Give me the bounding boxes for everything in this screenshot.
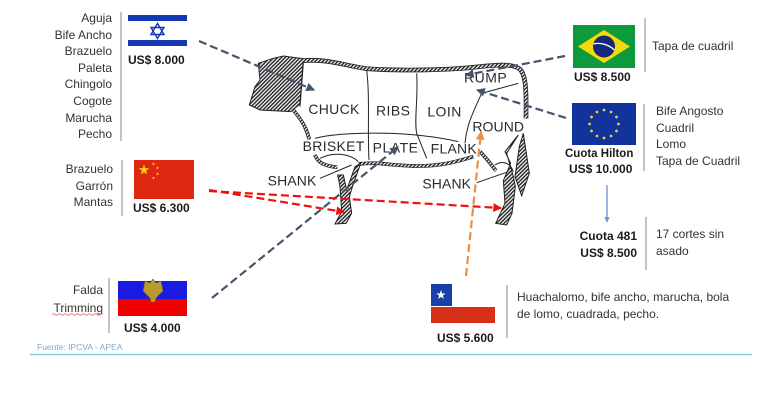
Israel cut list: Bife Ancho	[55, 28, 112, 42]
quota 481 price	[580, 229, 637, 260]
Hilton cut list: Tapa de Cuadril	[656, 154, 740, 168]
quota 481 price: US$ 8.500	[580, 246, 637, 260]
Hilton cut list: Cuadril	[656, 121, 694, 135]
Russia cut list: Trimming	[53, 301, 103, 315]
cut division lines	[300, 63, 518, 183]
panel: Chile	[431, 284, 729, 345]
Hilton quota price: Cuota Hilton	[565, 148, 633, 160]
arrow: Israel to chuck	[199, 41, 314, 90]
cut labels: ROUND	[472, 119, 524, 135]
arrow: European Union to rump and loin	[477, 90, 566, 118]
Russia cut list: Falda	[73, 283, 103, 297]
cut labels: SHANK	[422, 176, 472, 192]
cut labels: PLATE	[373, 139, 418, 155]
cut labels: SHANK	[268, 172, 317, 188]
China cut list: Brazuelo	[66, 162, 113, 176]
icon: Russia flag	[118, 279, 187, 316]
Israel cut list: Aguja	[81, 11, 112, 25]
arrow: China to rear shank	[209, 191, 501, 208]
cut labels: RUMP	[464, 70, 507, 86]
China cut list: Mantas	[74, 195, 113, 209]
Israel cut list: Brazuelo	[65, 44, 112, 58]
China cut list: Garrón	[76, 179, 113, 193]
icon: Israel flag	[128, 15, 187, 46]
panel: quota 481	[580, 217, 724, 270]
cut labels: LOIN	[427, 104, 461, 120]
cut labels: BRISKET	[303, 138, 365, 154]
source note: Fuente: IPCVA - APEA	[37, 342, 123, 352]
Israel cut list: Marucha	[65, 111, 112, 125]
panel: Israel	[55, 11, 187, 141]
cow chest, belly and flank bands	[293, 110, 496, 171]
quota 481 cut list: asado	[656, 244, 689, 258]
Brazil cut list: Tapa de cuadril	[652, 39, 733, 53]
Hilton cut list: Lomo	[656, 137, 686, 151]
Chile cut list: Huachalomo, bife ancho, marucha, bola	[517, 290, 729, 304]
quota 481 cut list: 17 cortes sin	[656, 227, 724, 241]
icon: China flag	[134, 160, 194, 199]
Israel cut list: Paleta	[78, 61, 112, 75]
arrow: Brazil to rump	[466, 56, 565, 75]
China price: US$ 6.300	[133, 201, 190, 215]
Chile cut list: de lomo, cuadrada, pecho.	[517, 307, 659, 321]
Israel cut list: Cogote	[73, 94, 112, 108]
panel: Brazil	[573, 18, 733, 84]
Israel cut list: Chingolo	[65, 77, 112, 91]
Russia cut list	[52, 283, 103, 315]
Hilton quota price: US$ 10.000	[569, 162, 633, 176]
Brazil price: US$ 8.500	[574, 70, 631, 84]
icon: European Union flag	[572, 103, 636, 145]
Israel cut list	[55, 11, 112, 141]
Israel cut list: Pecho	[78, 127, 112, 141]
quota 481 price: Cuota 481	[580, 229, 637, 243]
Chile cut list	[517, 290, 729, 321]
cow legs and tail	[335, 133, 529, 225]
cow diagram with beef cuts	[249, 56, 529, 225]
panel: China	[66, 160, 194, 216]
arrow: Chile to round	[466, 132, 481, 276]
icon: Chile flag	[431, 284, 495, 323]
icon: Brazil flag	[573, 25, 635, 68]
cut labels: RIBS	[376, 103, 410, 119]
Israel price: US$ 8.000	[128, 53, 185, 67]
cow back and rump band	[303, 60, 526, 118]
Hilton cut list: Bife Angosto	[656, 104, 724, 118]
Russia price: US$ 4.000	[124, 321, 181, 335]
Hilton cut list	[656, 104, 740, 168]
arrow: Hilton quota to quota 481	[606, 185, 608, 222]
cut labels	[268, 70, 524, 192]
China cut list	[66, 162, 113, 209]
cow head and neck	[249, 56, 303, 112]
cut labels: CHUCK	[308, 101, 360, 117]
panel: European Union Hilton quota	[565, 103, 740, 176]
arrow: Russia to plate	[212, 147, 398, 298]
quota 481 cut list	[656, 227, 724, 258]
cut labels: FLANK	[431, 140, 477, 156]
arrow: China to front shank	[209, 190, 344, 212]
Hilton quota price	[565, 148, 633, 176]
Chile price: US$ 5.600	[437, 331, 494, 345]
panel: Russia	[52, 278, 187, 335]
